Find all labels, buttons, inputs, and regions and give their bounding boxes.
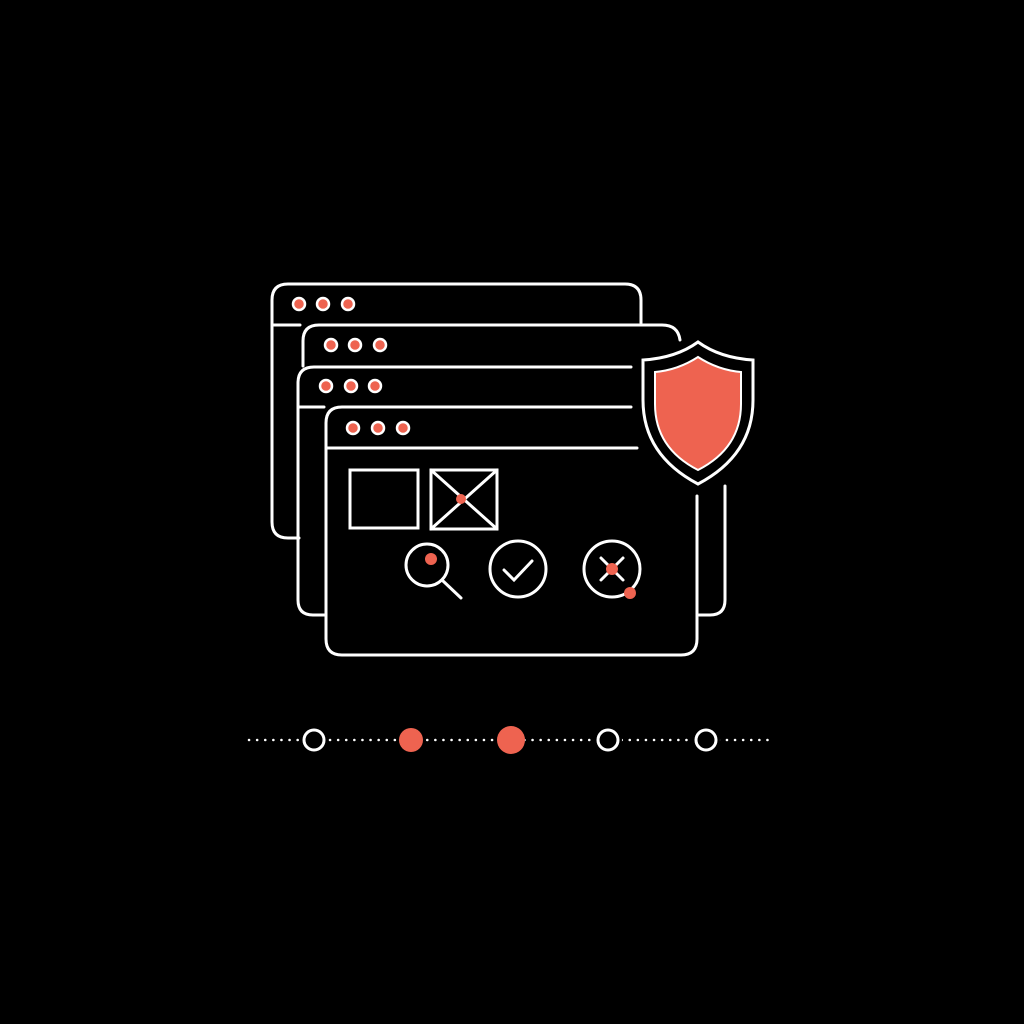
window 1 (back) — [272, 284, 641, 538]
icon: x circle — [584, 541, 640, 599]
icon: magnifier — [406, 544, 461, 598]
image placeholder boxes — [350, 470, 497, 529]
window 3 — [298, 367, 631, 615]
window 4 (front) — [326, 407, 697, 655]
icon: shield — [643, 342, 753, 484]
icon: check — [490, 541, 546, 597]
window 2 — [303, 325, 725, 615]
